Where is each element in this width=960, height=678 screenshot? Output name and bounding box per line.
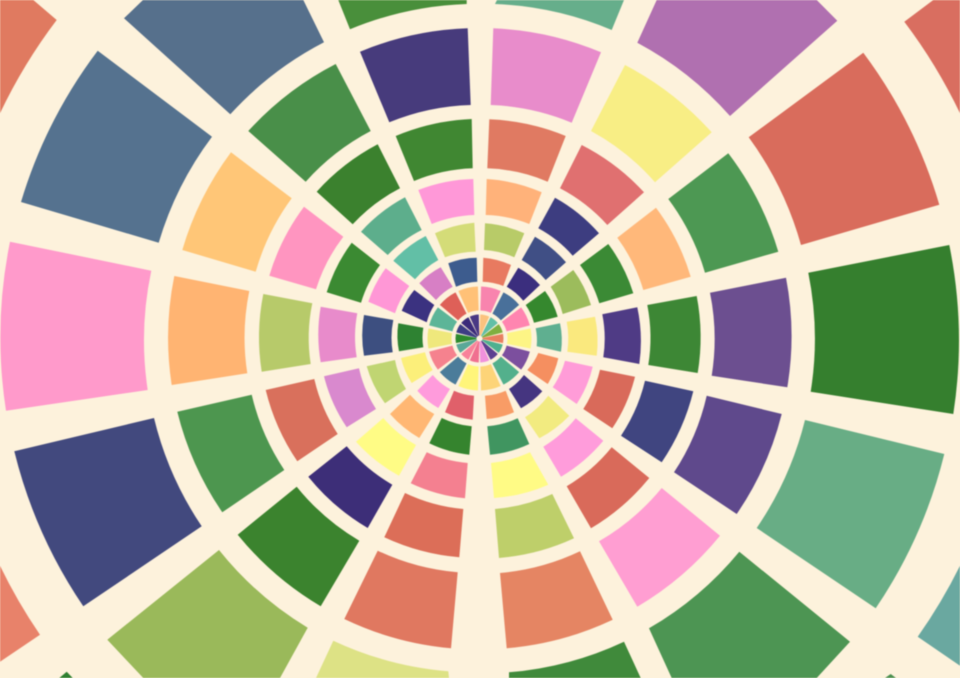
ring 2 (424, 283, 535, 394)
ring 3 (397, 258, 562, 420)
ring 7 (168, 28, 792, 648)
ring 6 (259, 119, 701, 558)
ring 5 (318, 179, 641, 498)
ring 4 (362, 223, 598, 455)
ring 1: innermost wedges (454, 313, 505, 364)
